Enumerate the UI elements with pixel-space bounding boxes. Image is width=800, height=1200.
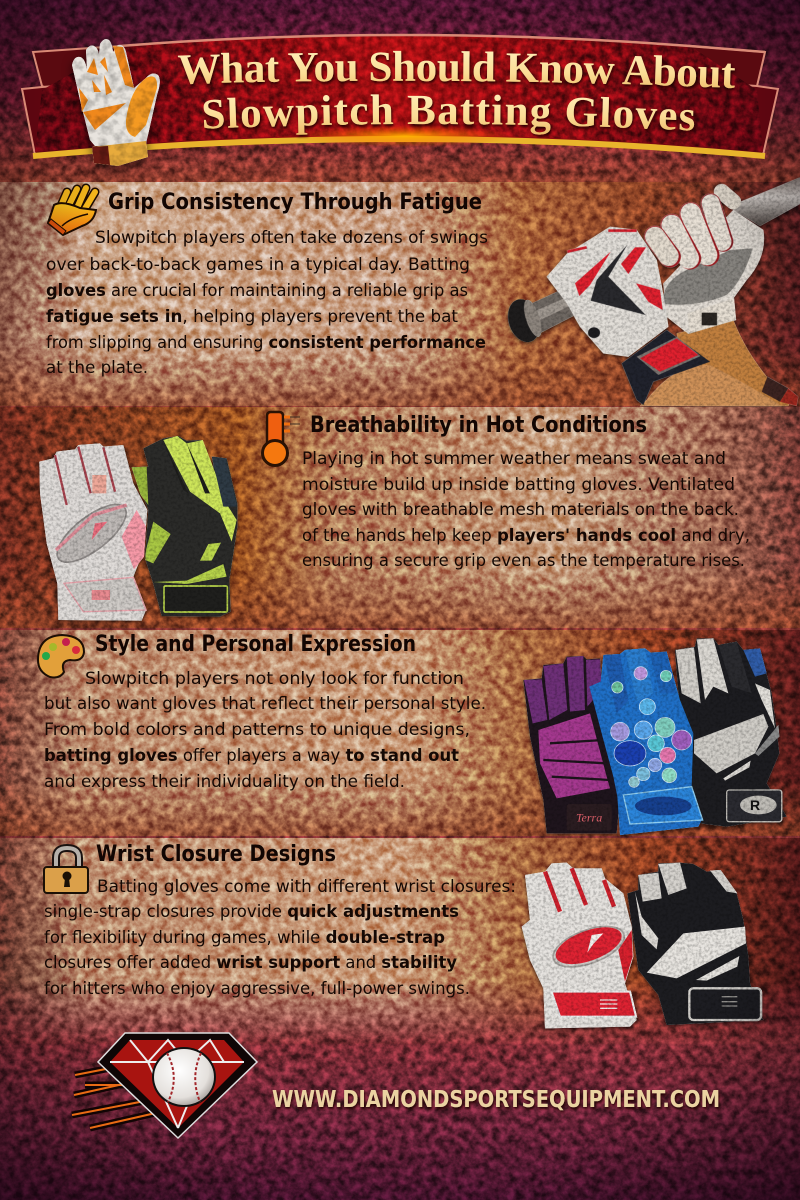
text block: gloves with breathable mesh materials on the back.: [302, 500, 739, 520]
ribbon back tails: [33, 46, 765, 118]
text block: for hitters who enjoy aggressive, full-power swings.: [44, 979, 470, 999]
text block: [46, 228, 488, 378]
illustration: purple, blue and black gloves: [523, 638, 787, 835]
text block: gloves are crucial for maintaining a reliable grip as: [46, 281, 468, 301]
text block: Slowpitch players not only look for function: [85, 669, 464, 689]
gold underline: [33, 139, 765, 156]
text block: of the hands help keep players' hands cool and dry,: [302, 526, 750, 546]
text block: [302, 449, 750, 571]
text block: but also want gloves that reflect their personal style.: [44, 694, 486, 714]
heading: Grip Consistency Through Fatigue: [108, 190, 482, 215]
text block: for flexibility during games, while double-strap: [44, 928, 445, 948]
text block: from slipping and ensuring consistent performance: [46, 333, 486, 353]
icon: orange hand: [48, 188, 96, 235]
title text: What You Should Know About: [178, 50, 737, 92]
text block: moisture build up inside batting gloves. Ventilated: [302, 475, 735, 495]
text block: and express their individuality on the field.: [44, 772, 405, 792]
text block: [44, 877, 516, 999]
text block: Batting gloves come with different wrist closures:: [97, 877, 516, 897]
heading: Style and Personal Expression: [95, 632, 416, 657]
text block: at the plate.: [46, 358, 148, 378]
website url: WWW.DIAMONDSPORTSEQUIPMENT.COM: [272, 1087, 720, 1113]
icon: paint palette: [38, 635, 84, 677]
panel: wrist closure: [0, 838, 800, 1044]
title text: Slowpitch Batting Gloves: [203, 94, 696, 139]
illustration: purple, blue and black gloves: Terra: [576, 811, 602, 825]
panel: style and expression: [0, 630, 800, 836]
icon: padlock: [44, 848, 88, 893]
heading: Breathability in Hot Conditions: [310, 413, 647, 438]
text block: From bold colors and patterns to unique designs,: [44, 720, 470, 740]
text block: over back-to-back games in a typical day. Batting: [46, 255, 470, 275]
text block: closures offer added wrist support and stability: [44, 953, 457, 973]
icon: thermometer: [262, 412, 300, 466]
illustration: purple, blue and black gloves: R: [750, 797, 760, 813]
panel: breathability: [0, 407, 800, 628]
text block: Slowpitch players often take dozens of swings: [95, 228, 488, 248]
speed streaks: [72, 1060, 160, 1128]
footer logo: diamond and baseball: [72, 1033, 257, 1138]
text block: fatigue sets in, helping players prevent the bat: [46, 307, 458, 327]
text block: [44, 669, 486, 792]
text block: Playing in hot summer weather means sweat and: [302, 449, 726, 469]
text block: ensuring a secure grip even as the temperature rises.: [302, 551, 745, 571]
title text: [178, 50, 737, 139]
illustration: white and lime gloves: [39, 436, 237, 621]
ribbon body: [22, 73, 778, 155]
title banner: [20, 34, 780, 176]
text block: single-strap closures provide quick adjustments: [44, 902, 459, 922]
illustration: gloved hands gripping a bat: [503, 177, 800, 406]
text block: batting gloves offer players a way to stand out: [44, 746, 459, 766]
icon: orange and white batting glove: [72, 39, 160, 166]
heading: Wrist Closure Designs: [96, 842, 336, 867]
panel: grip consistency: [0, 177, 800, 406]
illustration: red-white and black gloves: [522, 863, 763, 1028]
diamond: [98, 1033, 257, 1138]
baseball: [152, 1047, 216, 1107]
